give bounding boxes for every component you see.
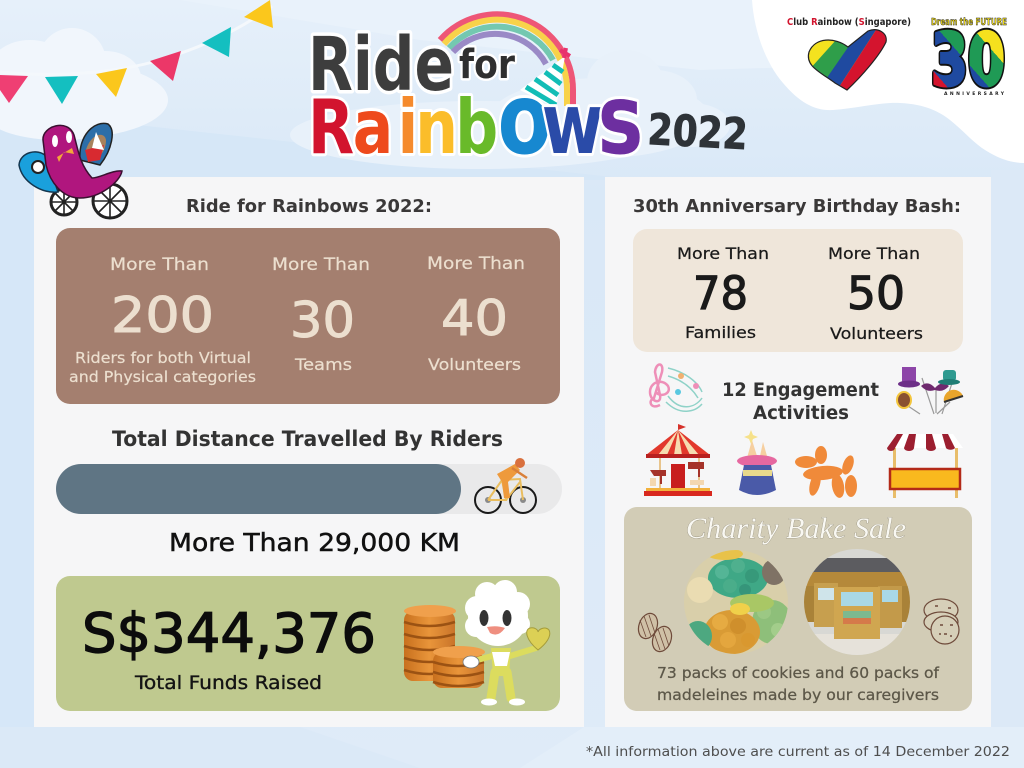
funds value: S$344,376	[82, 602, 376, 665]
footnote: *All information above are current as of 14 December 2022	[586, 744, 1010, 760]
stat: 50 volunteers: More Than	[828, 244, 920, 263]
heading: 12 engagement activities	[722, 379, 879, 424]
stat: 200 riders: and Physical categories	[69, 368, 256, 386]
icon: magic hat	[737, 430, 777, 495]
stat: 200 riders	[69, 255, 256, 386]
bake sale box	[624, 507, 972, 711]
bunting	[0, 0, 273, 104]
logo: Club Rainbow	[787, 18, 910, 91]
logo: 30th anniversary: ANNIVERSARY	[944, 91, 1005, 97]
icon: cloud mascot	[463, 580, 550, 706]
icon: market stall	[887, 434, 963, 498]
icon: cyclist	[475, 458, 536, 513]
stat: 200 riders: Riders for both Virtual	[75, 349, 251, 367]
bake sale caption: madeleines made by our caregivers	[657, 686, 939, 704]
stat: 78 families: 78	[693, 267, 748, 320]
icon: madeleines	[635, 611, 675, 654]
party hat	[520, 48, 570, 108]
logo: Club Rainbow: Club Rainbow (Singapore)	[787, 17, 911, 28]
stat: 50 volunteers: Volunteers	[830, 324, 923, 343]
heading: Ride for Rainbows 2022: Ride for Rainbows 2022:	[186, 196, 432, 217]
panel: Ride for Rainbows 2022	[34, 177, 584, 727]
heading: birthday bash: 30th Anniversary Birthday Bash:	[633, 196, 961, 217]
stat: 40 volunteers	[427, 254, 525, 374]
bake sale caption	[657, 664, 940, 704]
photo: cookies	[684, 548, 792, 654]
icon: coin stacks	[404, 605, 485, 688]
stats box: riders teams volunteers	[56, 228, 560, 404]
title logo: for	[459, 42, 515, 88]
photo: cookie packs	[804, 549, 912, 656]
stat: 78 families: Families	[685, 323, 756, 342]
cloud: behind title	[290, 50, 730, 169]
heading: total distance: Total Distance Travelled By Riders	[112, 427, 503, 451]
distance value: More Than 29,000 KM	[169, 528, 460, 557]
stat: 40 volunteers: 40	[441, 290, 508, 347]
stat: 40 volunteers: Volunteers	[428, 355, 521, 374]
stat: 30 teams: More Than	[272, 255, 370, 275]
stat: 30 teams: Teams	[294, 355, 352, 374]
title: Ride for: Ride	[308, 22, 454, 108]
top right white logo area	[752, 0, 1024, 163]
stat: 30 teams	[272, 255, 370, 374]
icon: music notes	[650, 364, 702, 411]
funds raised box	[56, 576, 560, 711]
mascot on bicycle	[19, 123, 127, 218]
year 2022: 2022	[646, 105, 749, 160]
icon: party props	[897, 367, 963, 414]
heading: Charity Bake Sale: Charity Bake Sale	[686, 512, 906, 545]
progress bar	[56, 464, 562, 514]
heading: 12 engagement activities: 12 Engagement	[722, 379, 879, 401]
stat: 78 families	[677, 244, 769, 342]
icon: balloon dog	[795, 446, 857, 499]
stat: 50 volunteers: 50	[847, 267, 905, 320]
stat: 30 teams: 30	[290, 292, 355, 349]
stat: 40 volunteers: More Than	[427, 254, 525, 274]
panel: 30th Anniversary Birthday Bash	[605, 177, 991, 727]
funds label: Total Funds Raised	[134, 672, 322, 694]
heading: 12 engagement activities: Activities	[753, 402, 849, 424]
icon: cookies	[924, 599, 959, 644]
stat: 50 volunteers	[828, 244, 923, 343]
stat: 200 riders: More Than	[110, 255, 209, 275]
title: Rainbows: Rainbows	[308, 62, 643, 176]
title logo	[308, 14, 749, 176]
stat: 78 families: More Than	[677, 244, 769, 263]
stats box: families volunteers	[633, 229, 963, 352]
icon: carousel	[644, 424, 712, 496]
rainbow	[440, 14, 573, 106]
cloud: left	[0, 28, 168, 140]
bake sale caption: 73 packs of cookies and 60 packs of	[657, 664, 940, 682]
stat: 200 riders: 200	[111, 287, 214, 344]
